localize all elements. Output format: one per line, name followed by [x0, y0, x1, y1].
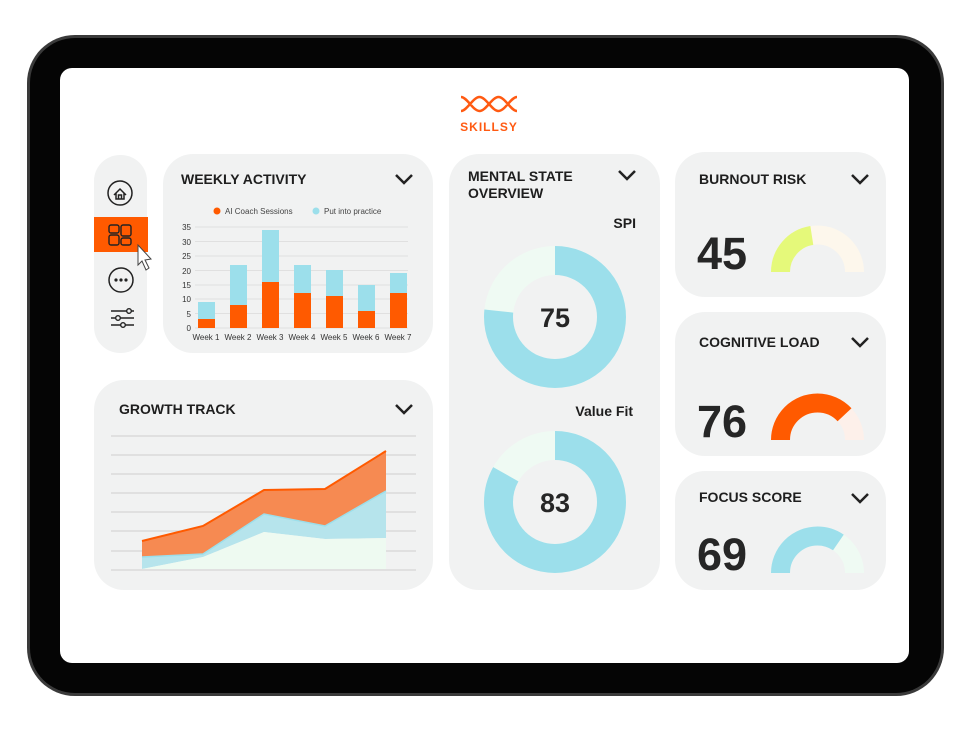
- donut: SPI: 75: [540, 303, 570, 333]
- icon: chevron: [619, 171, 635, 179]
- sidebar panel: [94, 155, 151, 353]
- bar chart: Week 7: [385, 333, 412, 342]
- legend: Put into practice: [324, 207, 382, 216]
- donut: SPI: SPI: [613, 215, 636, 231]
- panel: cognitive load: 76: [697, 396, 747, 447]
- donut: value fit: Value Fit: [575, 403, 633, 419]
- icon: home: [108, 181, 132, 205]
- bar chart: Week 3: [257, 333, 284, 342]
- bar chart: Week 2: [225, 333, 252, 342]
- heading: GROWTH TRACK: [119, 401, 236, 417]
- bar chart: Week 4: [289, 333, 316, 342]
- bar chart: Week 5: [321, 333, 348, 342]
- icon: more: [109, 268, 133, 292]
- bar chart: 15: [182, 281, 192, 290]
- panel: cognitive load: COGNITIVE LOAD: [699, 334, 820, 350]
- bar chart: 35: [182, 223, 192, 232]
- panel: burnout risk: [675, 152, 886, 297]
- bar chart: Week 6: [353, 333, 380, 342]
- panel: growth track: [94, 380, 433, 590]
- panel: weekly activity: [163, 154, 433, 353]
- icon: dashboard active: [94, 217, 148, 252]
- panel: focus score: FOCUS SCORE: [699, 489, 802, 505]
- bar chart: Week 1: [193, 333, 220, 342]
- panel: mental state overview: [449, 154, 660, 590]
- area chart: [111, 436, 416, 570]
- bar chart: [182, 223, 412, 342]
- gauge: burnout: [780, 235, 854, 272]
- bar chart: 0: [187, 324, 192, 333]
- logo: [460, 97, 518, 134]
- panel: focus score: [675, 471, 886, 590]
- legend: [214, 207, 382, 216]
- panel: cognitive load: [675, 312, 886, 456]
- donut: SPI: [498, 215, 636, 374]
- bar chart: 10: [182, 295, 192, 304]
- donut: value fit: [498, 403, 633, 558]
- bar chart: 30: [182, 238, 192, 247]
- bar chart: 25: [182, 252, 192, 261]
- panel: focus score: 69: [697, 529, 747, 580]
- heading: WEEKLY ACTIVITY: [181, 171, 307, 187]
- logo: SKILLSY: [460, 120, 518, 134]
- legend: AI Coach Sessions: [225, 207, 293, 216]
- bar chart: 5: [187, 310, 192, 319]
- icon: chevron: [396, 175, 412, 183]
- icon: cursor: [138, 245, 151, 270]
- icon: chevron: [396, 405, 412, 413]
- heading: MENTAL STATE: [468, 168, 573, 184]
- donut: value fit: 83: [540, 488, 570, 518]
- gauge: cognitive: [780, 403, 854, 440]
- panel: burnout risk: BURNOUT RISK: [699, 171, 806, 187]
- panel: burnout risk: 45: [697, 228, 747, 279]
- icon: sliders: [111, 309, 134, 327]
- heading: OVERVIEW: [468, 185, 544, 201]
- gauge: focus: [780, 536, 854, 573]
- bar chart: 20: [182, 267, 192, 276]
